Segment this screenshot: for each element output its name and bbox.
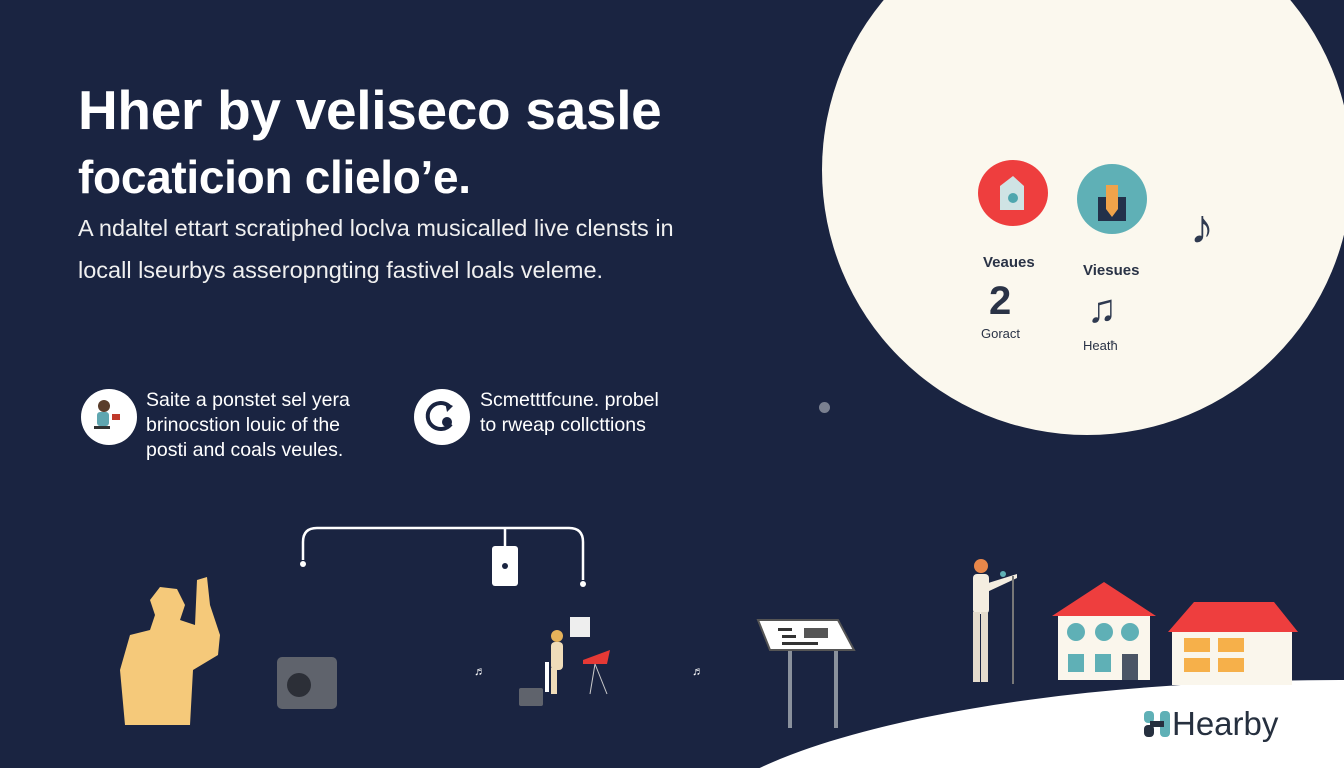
subtitle bbox=[78, 215, 674, 283]
text: Scmetttfcune. probel bbox=[480, 389, 659, 411]
circle stats bbox=[978, 160, 1214, 353]
icon: music note: ♪ bbox=[1190, 201, 1214, 254]
number 2: 2 bbox=[989, 279, 1011, 323]
text: posti and coals veules. bbox=[146, 439, 343, 461]
connector bracket bbox=[300, 526, 586, 587]
icon: refresh bbox=[414, 389, 470, 445]
label: Heath: Heatħ bbox=[1083, 338, 1118, 353]
hill bbox=[760, 680, 1344, 768]
feature 1 bbox=[81, 389, 350, 461]
feature 2 bbox=[414, 389, 659, 445]
house 1 bbox=[1052, 582, 1156, 680]
subtitle: locall lseurbys asseropngting fastivel loals veleme. bbox=[78, 257, 603, 283]
text: ♬ bbox=[692, 664, 704, 678]
big cream circle panel bbox=[822, 0, 1344, 435]
house 2 bbox=[1168, 602, 1298, 685]
icon: speaker bbox=[277, 657, 337, 709]
title bbox=[78, 79, 661, 203]
label: Goract: Goract bbox=[981, 326, 1020, 341]
text bbox=[146, 389, 350, 461]
sign board bbox=[756, 619, 856, 728]
icon: red venue bbox=[978, 160, 1048, 226]
label: Veaues: Veaues bbox=[983, 254, 1035, 271]
icon: person at desk bbox=[81, 389, 137, 445]
logo: Hearby: Hearby bbox=[1172, 705, 1278, 742]
label: Viesues: Viesues bbox=[1083, 262, 1139, 279]
icon: music notes: ♫ bbox=[1087, 287, 1117, 331]
title: focaticion clielo’e. bbox=[78, 151, 471, 203]
figure: pointing person bbox=[120, 577, 220, 725]
text: brinocstion louic of the bbox=[146, 414, 340, 436]
title: Hher by veliseco sasle bbox=[78, 79, 661, 141]
text: Saite a ponstet sel yera bbox=[146, 389, 350, 411]
icon: teal person bbox=[1077, 164, 1147, 234]
text bbox=[480, 389, 659, 436]
text: to rweap collcttions bbox=[480, 414, 646, 436]
dot bbox=[819, 402, 830, 413]
subtitle: A ndaltel ettart scratiphed loclva musicalled live clensts in bbox=[78, 215, 674, 241]
music notes small: ♬ bbox=[474, 664, 486, 678]
figure: singer with mic bbox=[973, 559, 1017, 684]
figure: musician at keyboard bbox=[519, 617, 610, 706]
